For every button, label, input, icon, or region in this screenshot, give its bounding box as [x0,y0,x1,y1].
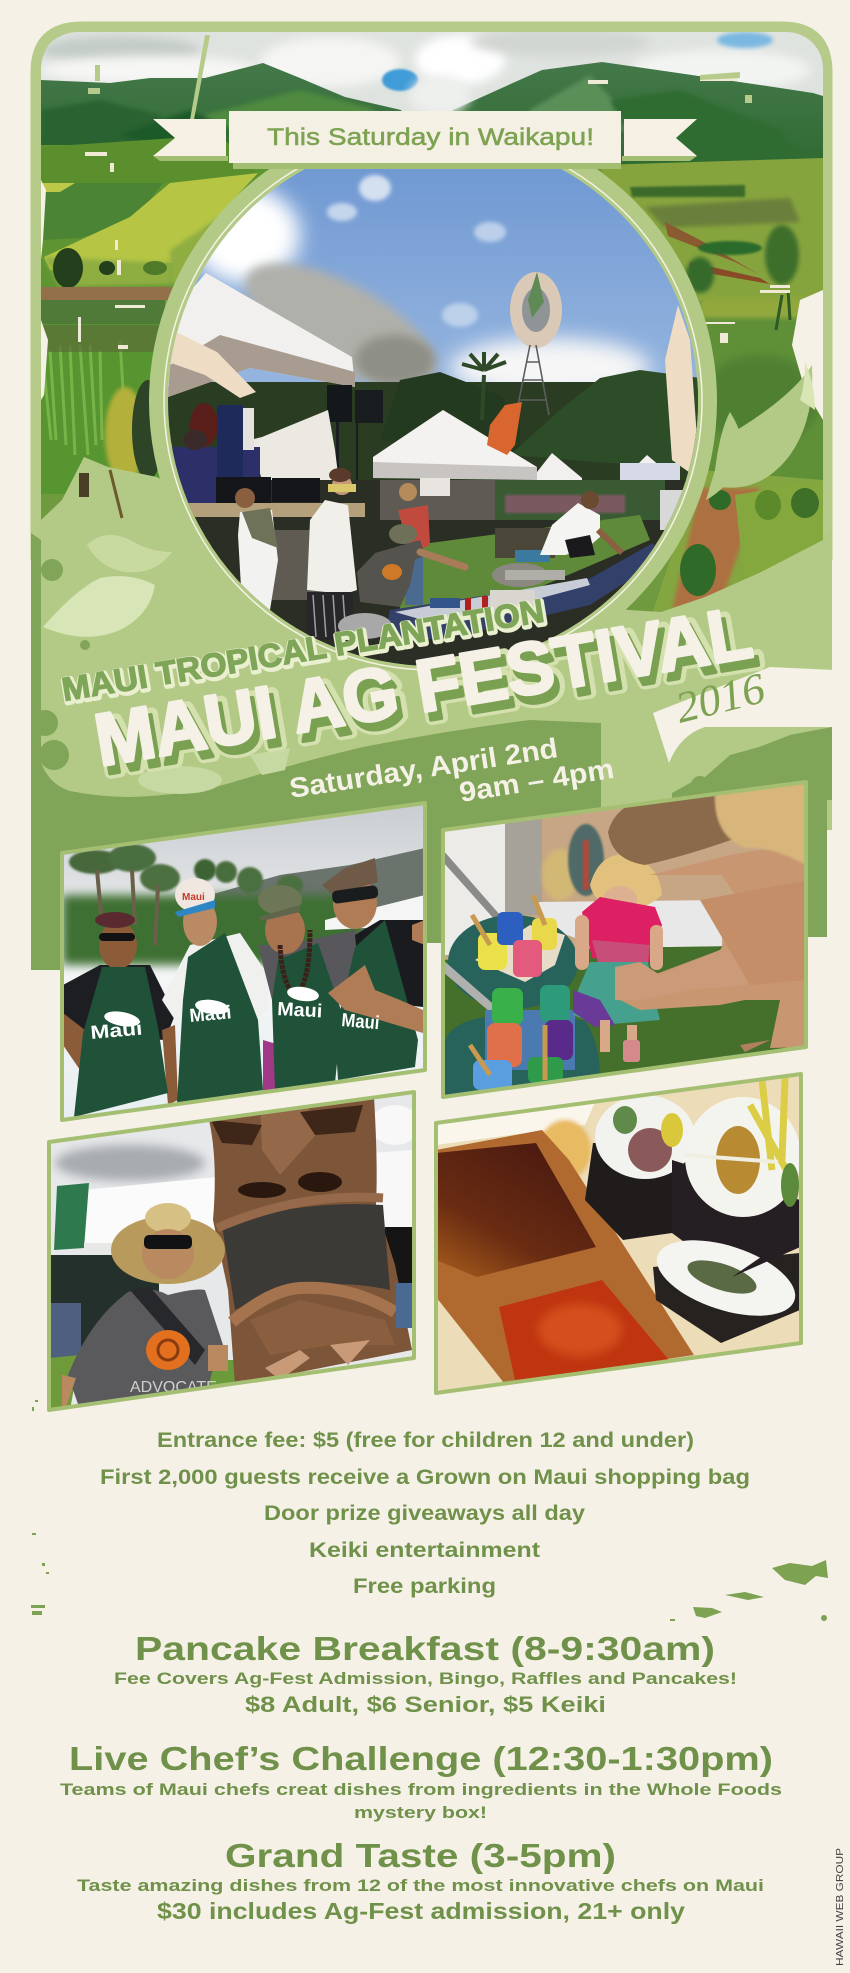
mountain [210,848,425,940]
light green lower panel [31,457,832,830]
gingham table [385,543,660,640]
man 2 [162,878,268,1103]
time text: 9am – 4pm [457,753,616,808]
grass [443,945,806,1097]
white mattress [538,900,722,947]
chef in white [307,468,357,640]
woman hair [608,782,808,865]
stage [160,403,365,517]
circular event photo [149,169,717,670]
section: pancake breakfast: Pancake Breakfast (8-9:30am) [135,1630,715,1667]
apron logos: Maui [90,1019,143,1044]
trees [62,844,362,965]
frame border [36,27,827,560]
banner ribbon [153,111,697,169]
child [573,854,663,1062]
paint cups [470,895,575,1090]
roll 2 [672,1078,801,1277]
photo: tiki statue [49,1090,420,1410]
man in camo [235,488,278,610]
man with hat: ADVOCATE [130,1379,217,1396]
cream torn patch right [665,305,696,472]
icon: windmill shed silhouette [79,470,165,518]
main white tent [165,273,355,398]
tray [436,1130,694,1383]
tiki [209,1094,412,1385]
apron logos: Maui [341,1010,380,1034]
man 3 [258,885,355,1090]
photo: chefs in aprons [62,800,427,1125]
landscape photo [41,32,823,612]
grunge splatter right [670,1560,828,1621]
apron logos: Maui [277,999,323,1022]
info list: Free parking [353,1575,496,1598]
clouds [190,175,650,398]
info list: First 2,000 guests receive a Grown on Maui shopping bag [100,1466,750,1489]
subtitle: Maui Tropical Plantation: MAUI TROPICAL PLANTATION [60,594,548,710]
painted canvas [542,849,578,901]
section: live chef's challenge [60,1740,782,1822]
woman in back [398,483,430,605]
purple table [263,1040,275,1090]
icon: leaves top right [706,362,815,500]
title: Maui AG Festival: MAUI AG FESTIVAL [89,590,758,782]
aloha sign [620,463,680,480]
green banner [54,1183,89,1250]
light green streaks [88,35,752,125]
sky [168,169,698,430]
section: grand taste: Grand Taste (3-5pm) [225,1837,616,1874]
man 4 [322,858,425,1080]
tree line [160,352,705,482]
white tents [254,410,656,480]
section: grand taste [77,1837,764,1924]
date text: Saturday, April 2nd [287,732,560,804]
credit: HAWAII WEB GROUP [835,1848,846,1966]
fields left [41,138,269,494]
tent wall [443,820,508,955]
roll 3 [648,1225,804,1343]
section: pancake breakfast: $8 Adult, $6 Senior, $5 Keiki [245,1692,606,1717]
speakers [327,385,383,480]
bare tree [240,258,442,382]
icon: leaves left [43,535,172,637]
grunge blobs on band edge [32,559,709,794]
section: grand taste: $30 includes Ag-Fest admission, 21+ only [157,1898,685,1924]
section: grand taste: Taste amazing dishes from 12 of the most innovative chefs on Maui [77,1876,764,1895]
windmill [510,272,562,415]
apron logos: Maui [189,1002,232,1027]
banner tail right [624,119,697,156]
info list [100,1429,750,1598]
title: Maui AG Festival: MAUI AG FESTIVAL [94,599,763,790]
photo: child painting [443,780,808,1100]
crowd [49,1255,245,1410]
subtitle: Maui Tropical Plantation: MAUI TROPICAL PLANTATION [59,592,547,708]
right chef [540,491,622,558]
info list: Keiki entertainment [309,1539,540,1562]
hibiscus watermark [138,748,290,794]
man 1 [63,912,178,1117]
cream tear right edge [41,180,823,420]
section: live chef's challenge: mystery box! [354,1803,487,1822]
info list: Door prize giveaways all day [264,1502,585,1525]
table items [270,530,330,600]
woman body [615,850,808,1052]
white tent [84,1177,217,1250]
mountains [41,62,823,170]
cream specks on landscape [78,77,790,349]
photo: sushi and sauces [436,1070,804,1395]
section: pancake breakfast: Fee Covers Ag-Fest Admission, Bingo, Raffles and Pancakes! [114,1669,737,1688]
year label: 2016 [671,663,770,733]
crouching man [357,524,465,607]
sky and clouds [41,32,823,111]
title: Maui AG Festival: MAUI AG FESTIVAL [95,597,764,789]
fields right [600,158,823,620]
section: live chef's challenge: Live Chef’s Challenge (12:30-1:30pm) [69,1740,773,1777]
sauce red [499,1280,669,1380]
section: pancake breakfast [114,1630,737,1717]
dark green wave band [31,533,832,1000]
info list: Entrance fee: $5 (free for children 12 and under) [157,1429,694,1452]
grunge splatter left [31,1400,49,1615]
white tents back [325,895,425,930]
steel bowl [338,613,392,639]
cream ribbon for year [653,667,834,763]
banner text: This Saturday in Waikapu! [267,124,594,151]
teal tables [443,915,600,1100]
orange flag [487,402,522,455]
apron logos [90,985,380,1044]
roll 1 [585,1095,695,1240]
under tent scene [160,478,705,670]
banner tail left [153,119,226,156]
section: live chef's challenge: Teams of Maui chefs creat dishes from ingredients in the Whole Foods [60,1780,782,1799]
man 2: Maui [182,892,205,903]
man with hat [62,1203,228,1410]
sauce brown [436,1143,596,1277]
